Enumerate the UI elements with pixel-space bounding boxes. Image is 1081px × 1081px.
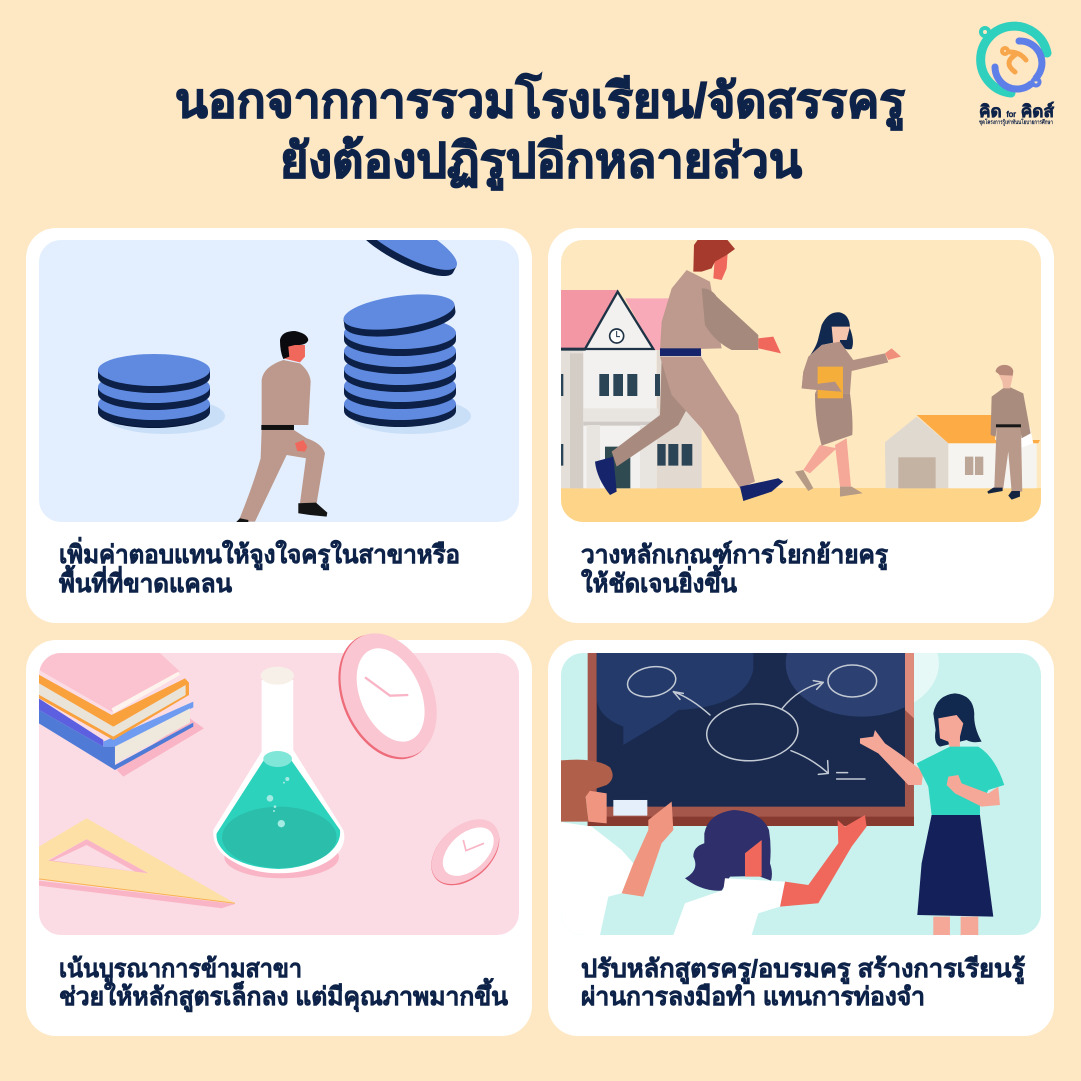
panel: curriculum reform xyxy=(548,610,1054,1036)
left coin stack xyxy=(98,354,225,434)
middle student xyxy=(673,810,867,935)
caption: วางหลักเกณฑ์การโยกย้ายครู xyxy=(581,539,889,571)
illustration: school, teachers, house xyxy=(561,239,1041,522)
panel: transfer criteria xyxy=(548,228,1054,623)
caption: ให้ชัดเจนยิ่งขึ้น xyxy=(581,564,737,598)
caption: เพิ่มค่าตอบแทนให้จูงใจครูในสาขาหรือ xyxy=(59,537,460,571)
house xyxy=(885,415,1040,488)
teacher at board xyxy=(860,693,1004,935)
panel: integrated subjects xyxy=(26,618,532,1036)
caption: ช่วยให้หลักสูตรเล็กลง แต่มีคุณภาพมากขึ้น xyxy=(59,977,508,1013)
icon: logo orange figure xyxy=(1003,49,1026,72)
chalk diagram xyxy=(625,663,877,779)
caption: ผ่านการลงมือทำ แทนการท่องจำ xyxy=(581,983,925,1011)
logo xyxy=(979,26,1055,127)
panel: pay incentives xyxy=(26,200,532,623)
title xyxy=(175,72,905,191)
left student xyxy=(558,760,673,935)
caption xyxy=(581,955,1026,1011)
caption: พื้นที่ที่ขาดแคลน xyxy=(59,564,232,598)
caption: เน้นบูรณาการข้ามสาขา xyxy=(59,955,302,985)
large running teacher xyxy=(595,239,783,501)
blackboard xyxy=(588,653,939,826)
icon: logo teal ring xyxy=(981,26,1047,93)
caption xyxy=(59,537,460,598)
right coin stack xyxy=(344,240,471,434)
logo subtitle: ชุดโครงการรู้เท่าทันนโยบายการศึกษา xyxy=(979,118,1053,127)
icon: logo blue ring xyxy=(995,41,1042,89)
title: ยังต้องปฏิรูปอีกหลายส่วน xyxy=(280,135,802,191)
books xyxy=(33,650,204,777)
flask xyxy=(213,667,344,878)
caption: ปรับหลักสูตรครู/อบรมครู สร้างการเรียนรู้ xyxy=(581,955,1026,985)
female teacher xyxy=(795,312,901,497)
large clock xyxy=(320,618,455,775)
school xyxy=(561,290,702,488)
small male teacher xyxy=(987,365,1033,500)
illustration: classroom xyxy=(561,653,1004,935)
logo wordmark: คิด for คิดส์ xyxy=(979,101,1055,121)
caption xyxy=(581,539,889,598)
caption xyxy=(59,955,508,1013)
ruler xyxy=(33,818,235,908)
walking teacher xyxy=(236,331,327,523)
illustration: coins and walking teacher xyxy=(98,240,471,522)
title: นอกจากการรวมโรงเรียน/จัดสรรครู xyxy=(175,72,905,131)
illustration: books, ruler, flask, clocks xyxy=(33,618,512,908)
small clock xyxy=(419,807,512,898)
